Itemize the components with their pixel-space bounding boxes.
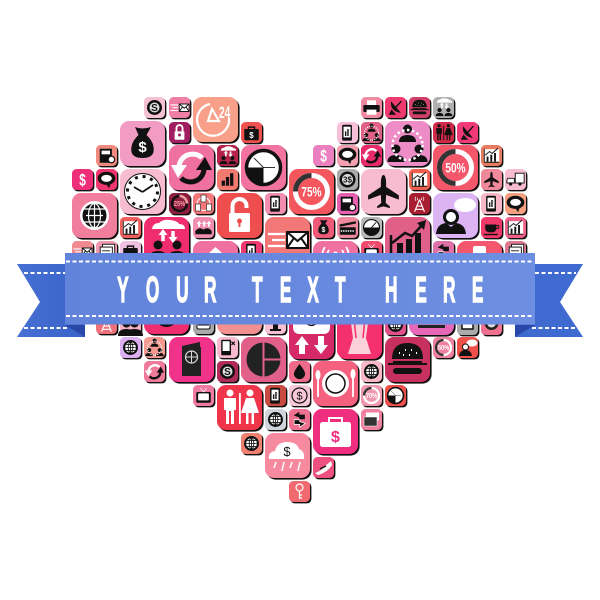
- tile: dial lower: [481, 314, 503, 336]
- banner panel: [65, 253, 535, 324]
- tile: globe lower: [385, 314, 407, 336]
- tile: people lower: [118, 313, 143, 336]
- tile: phone wifi: [337, 122, 359, 144]
- heart of icon tiles: [72, 97, 527, 503]
- tile: burger: [409, 97, 431, 119]
- tile: chat: [337, 145, 359, 167]
- tile: wall clock: [120, 169, 167, 216]
- ribbon tail: right: [515, 264, 583, 337]
- tile: tv: [361, 241, 383, 263]
- tile: files: [505, 241, 527, 263]
- tile: phone: [481, 193, 503, 215]
- tile: 50 percent donut: [433, 145, 480, 192]
- tile: dollar: [72, 169, 94, 191]
- tile: sneaker: [313, 457, 335, 479]
- tile: grey 3 dollar dial: 3$: [343, 176, 352, 184]
- tile: antenna lower: [96, 313, 118, 335]
- tile: document search: [96, 145, 118, 167]
- tile: water drop: [289, 361, 311, 383]
- tile: dollar circle: $: [296, 390, 303, 402]
- tile: restroom large: [217, 385, 264, 432]
- tile: large dark rectangle: [217, 289, 264, 336]
- tile: globe lilac: [120, 337, 142, 359]
- tile: 50 percent small: 50%: [438, 344, 449, 352]
- tile: call centre headset: [433, 193, 480, 240]
- tile: tablet: [265, 385, 287, 407]
- tile: globe: [72, 193, 119, 240]
- tile: suitcase: [120, 241, 142, 263]
- tile: phone large: [457, 241, 504, 288]
- tile: milkshake glass: [337, 314, 384, 361]
- tile: money case: $: [331, 429, 340, 446]
- tile: briefcase: $: [249, 131, 254, 140]
- tile: large mail: [265, 217, 312, 264]
- tile: coffee cup: [481, 217, 503, 239]
- tile: dollar coin lower: [217, 361, 239, 383]
- tile: globe grey: [265, 409, 287, 431]
- tile: key: [289, 481, 311, 503]
- tile: dollar circle: [289, 385, 311, 407]
- tile: swap arrows: [289, 409, 311, 431]
- tile: cloud people large: [144, 217, 191, 264]
- tile: money bag: $: [322, 227, 326, 234]
- tile: 25 percent: [169, 193, 191, 215]
- tile: chart: [120, 217, 142, 239]
- tile: 24 hour clock: [193, 97, 240, 144]
- tile: people triangle: [144, 337, 166, 359]
- tile: dollar: $: [79, 172, 86, 190]
- tile: large dark circle: [144, 289, 191, 336]
- tile: large plane: [361, 169, 408, 216]
- tile: burger large: [385, 337, 432, 384]
- tile: dollar: [313, 145, 335, 167]
- tile: refresh arrows: [169, 145, 216, 192]
- tile: satellite: [385, 97, 407, 119]
- banner title: YOUR TEXT HERE: [117, 269, 483, 310]
- tile: 75 percent donut: [289, 169, 336, 216]
- tile: satellite: [457, 122, 479, 144]
- tile: 70 percent: 70%: [366, 392, 377, 400]
- tile: money bag: $: [138, 139, 147, 156]
- tile: dinner plate: [313, 361, 360, 408]
- tile: smiling cloud arrows: [289, 314, 336, 361]
- tile: large rising chart: [385, 217, 432, 264]
- tile: plane: [481, 169, 503, 191]
- tile: globe coral: [241, 433, 263, 455]
- tile: money bag: [120, 121, 167, 168]
- tile: wifi large: [313, 241, 360, 288]
- tile: 25 percent: 25%: [174, 200, 185, 208]
- tile: swap arrows: [433, 241, 455, 263]
- tile: grey cloud people: [433, 97, 455, 119]
- tile: money case: [313, 409, 360, 456]
- tile: home large: [193, 241, 240, 288]
- tile: chat: [96, 169, 118, 191]
- tile: truck: [505, 169, 527, 191]
- tile: dark pie clock: [241, 145, 288, 192]
- tile: speech agent: [457, 337, 479, 359]
- tile: briefcase: [241, 122, 263, 144]
- ribbon tail: left: [17, 264, 85, 337]
- tile: people network: [361, 122, 383, 144]
- tile: money rain cloud: [265, 433, 312, 480]
- tile: falling chart: [481, 145, 503, 167]
- tile: refresh: [361, 145, 383, 167]
- tile: cloud people: [217, 145, 239, 167]
- tile: chart: [409, 169, 431, 191]
- tile: dollar: $: [320, 148, 327, 166]
- tile: antenna: [409, 193, 431, 215]
- tile: globe pale: [361, 361, 383, 383]
- tile: chat: [505, 193, 527, 215]
- tile: dollar coin lower: S: [224, 367, 231, 378]
- tile: printer: [361, 97, 383, 119]
- tile: open padlock: [217, 193, 264, 240]
- tile: 70 percent: [361, 385, 383, 407]
- tile: money rain cloud: $: [283, 444, 291, 459]
- tile: gauge: [361, 217, 383, 239]
- tile: map phone: [217, 337, 239, 359]
- tile: grey 3 dollar dial: [337, 169, 359, 191]
- tile: 50 percent donut: 50%: [445, 160, 466, 176]
- tile: restroom small: [433, 122, 455, 144]
- tile: phones network: [193, 193, 215, 215]
- tile: 75 percent donut: 75%: [301, 184, 322, 200]
- tile: credit card: [361, 409, 383, 431]
- tile: pale light: [265, 313, 287, 335]
- tile: chart: [505, 217, 527, 239]
- tile: clapper: [337, 217, 359, 239]
- tile: grey printer: [457, 314, 479, 336]
- tile: 50 percent small: [433, 337, 455, 359]
- tile: clock coral: [385, 385, 407, 407]
- tile: money bag: [313, 217, 335, 239]
- tile: people circle large: [385, 121, 432, 168]
- tile: passport: [169, 337, 216, 384]
- tile: orchid wide: [409, 290, 456, 337]
- tile: pie chart: [241, 337, 288, 384]
- tile: tv lower: [193, 385, 215, 407]
- tile: small lock: [169, 122, 191, 144]
- tile: refresh lower: [144, 361, 166, 383]
- tile: document: [337, 193, 359, 215]
- tile: phone: [265, 193, 287, 215]
- tile: mail lower: [72, 241, 94, 263]
- tile: bars: [217, 169, 239, 191]
- tile: trees: [193, 217, 215, 239]
- tile: dollar coin: S: [151, 103, 158, 114]
- tile: grey list: [193, 313, 215, 335]
- tile: fast mail: [169, 97, 191, 119]
- tile: 24 hour clock: 24: [219, 102, 230, 122]
- tile: wifi phone: [241, 241, 263, 263]
- tile: dollar coin: [144, 97, 166, 119]
- tile: files: [96, 241, 118, 263]
